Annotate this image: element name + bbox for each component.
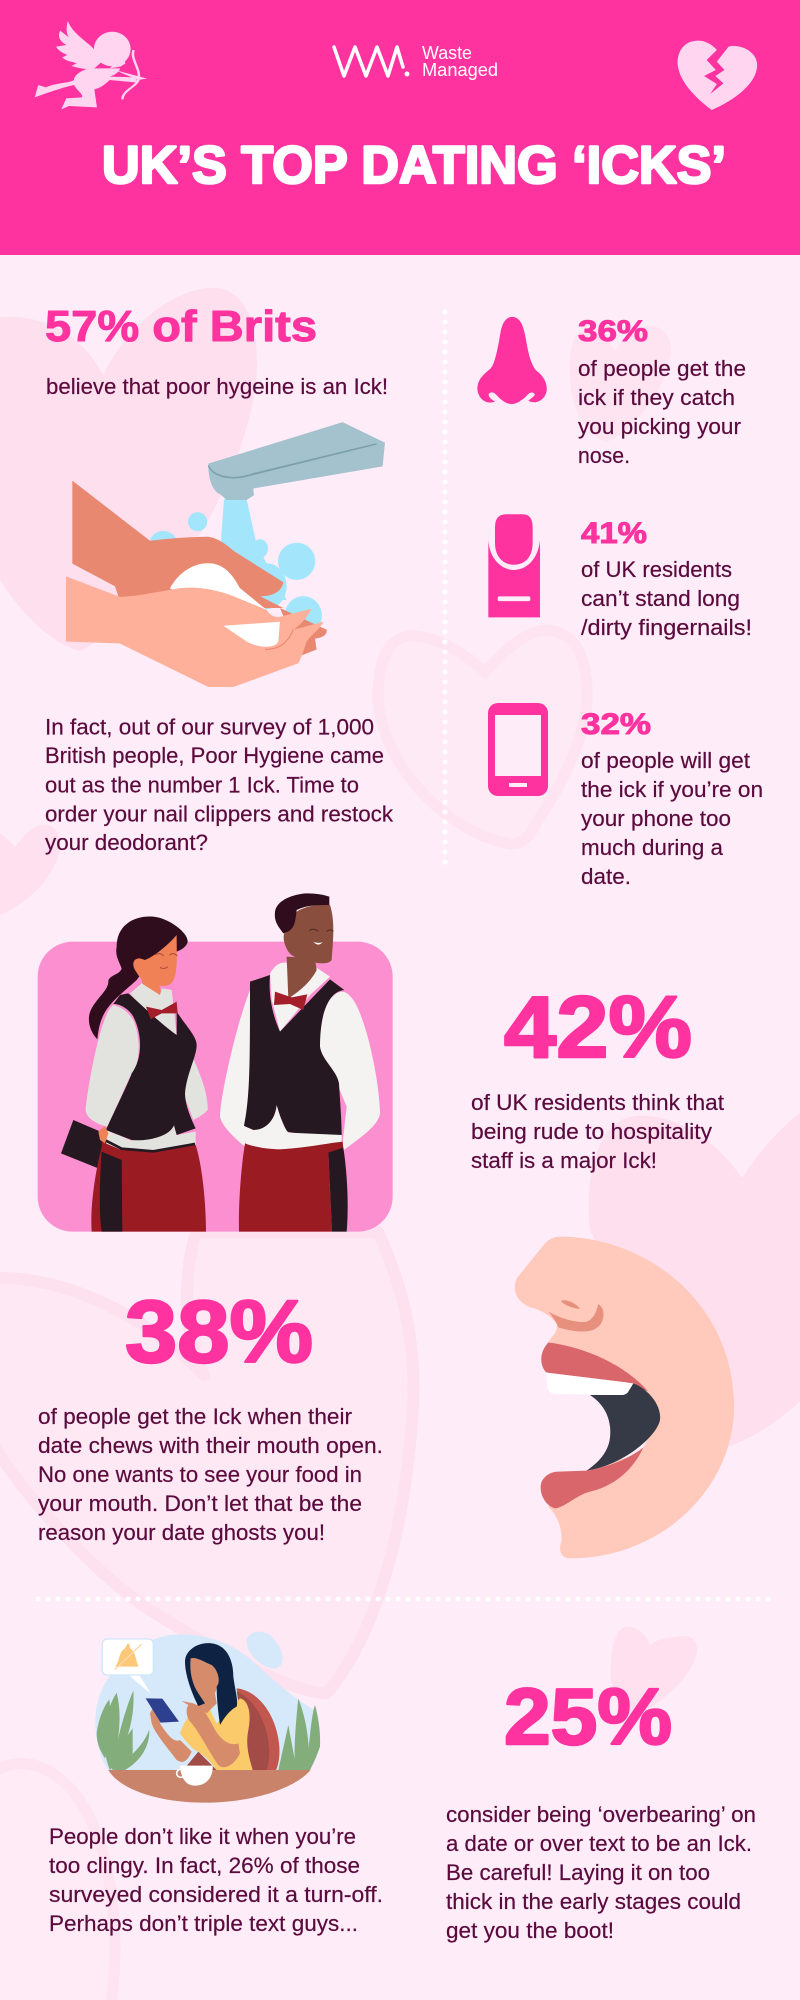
stat: 41% fingernails xyxy=(581,517,752,640)
man waiter xyxy=(220,893,380,1232)
text: poor hygeine: believe that poor hygeine is an Ick! xyxy=(46,374,388,399)
stat: 41% fingernails: 41% xyxy=(581,517,647,550)
stat: 41% fingernails: can’t stand long xyxy=(581,586,740,611)
stat: 38% chewing: date chews with their mouth open. xyxy=(38,1433,383,1458)
text: survey paragraph: In fact, out of our survey of 1,000 xyxy=(45,714,374,740)
stat: 36% nose picking xyxy=(578,315,746,468)
illustration: woman on phone xyxy=(95,1632,320,1803)
stat: 25% overbearing: consider being ‘overbearing’ on xyxy=(446,1802,756,1827)
logo: Waste Managed: Waste xyxy=(422,43,472,63)
stat: 32% phone use: 32% xyxy=(581,708,651,741)
stat: 42% rude to staff: being rude to hospitality xyxy=(471,1119,712,1144)
stat: 25% overbearing: Be careful! Laying it on too xyxy=(446,1860,710,1885)
stat: 36% nose picking: 36% xyxy=(578,315,648,348)
stat: 32% phone use: your phone too xyxy=(581,806,731,831)
text: too clingy: surveyed considered it a turn-off. xyxy=(49,1882,383,1907)
panel: waiters illustration xyxy=(38,893,393,1232)
stat heading: 57% of Brits: 57% of Brits xyxy=(45,302,317,351)
icon: fingernail xyxy=(488,514,540,617)
stat: 32% phone use xyxy=(581,708,763,889)
stat: 38% chewing: No one wants to see your food in xyxy=(38,1462,362,1487)
illustration: open mouth xyxy=(515,1237,734,1558)
illustration: hands washing under tap xyxy=(66,422,385,687)
stat: 41% fingernails: of UK residents xyxy=(581,557,732,582)
stat: 25% overbearing: thick in the early stages could xyxy=(446,1889,741,1914)
text: survey paragraph xyxy=(45,714,394,855)
stat: 42% rude to staff: staff is a major Ick! xyxy=(471,1148,657,1173)
stat: 25% overbearing: get you the boot! xyxy=(446,1918,614,1943)
text: too clingy: People don’t like it when you’re xyxy=(49,1824,356,1849)
title: UK’S TOP DATING ‘ICKS’ xyxy=(102,136,726,195)
stat: 25% overbearing: a date or over text to be an Ick. xyxy=(446,1831,752,1856)
icon: broken heart xyxy=(678,41,757,110)
text: survey paragraph: out as the number 1 Ick. Time to xyxy=(45,772,359,798)
text: survey paragraph: your deodorant? xyxy=(45,830,208,855)
stat: 32% phone use: the ick if you’re on xyxy=(581,777,763,802)
stat: 42% rude to staff xyxy=(471,979,724,1173)
stat: 38% chewing: reason your date ghosts you! xyxy=(38,1520,325,1545)
icon: phone xyxy=(488,703,548,796)
text: too clingy: Perhaps don’t triple text guys... xyxy=(49,1911,358,1936)
stat: 38% chewing: your mouth. Don’t let that be the xyxy=(38,1491,362,1516)
stat: 25% overbearing xyxy=(446,1672,756,1943)
stat: 36% nose picking: you picking your xyxy=(578,414,741,439)
header band xyxy=(0,0,800,255)
stat: 36% nose picking: nose. xyxy=(578,443,630,468)
stat: 32% phone use: date. xyxy=(581,864,631,889)
stat: 32% phone use: much during a xyxy=(581,835,724,860)
text: survey paragraph: order your nail clippers and restock xyxy=(45,802,394,826)
stat: 38% chewing xyxy=(38,1282,383,1545)
logo: Waste Managed xyxy=(334,43,498,80)
stat: 38% chewing: 38% xyxy=(125,1282,313,1381)
stat: 42% rude to staff: 42% xyxy=(504,979,692,1076)
logo: Waste Managed: Managed xyxy=(422,60,498,80)
icon: nose xyxy=(477,317,547,404)
stat: 36% nose picking: ick if they catch xyxy=(578,385,735,410)
woman waiter xyxy=(61,916,208,1232)
icon: cupid xyxy=(35,21,147,109)
stat: 36% nose picking: of people get the xyxy=(578,356,746,381)
stat: 42% rude to staff: of UK residents think that xyxy=(471,1090,724,1115)
text: too clingy xyxy=(49,1824,383,1936)
text: survey paragraph: British people, Poor Hygiene came xyxy=(45,743,384,768)
stat: 41% fingernails: /dirty fingernails! xyxy=(581,615,752,640)
text: too clingy: too clingy. In fact, 26% of those xyxy=(49,1853,360,1878)
notification bubble xyxy=(102,1639,153,1694)
stat: 25% overbearing: 25% xyxy=(504,1672,672,1761)
stat: 38% chewing: of people get the Ick when their xyxy=(38,1404,352,1429)
stat: 32% phone use: of people will get xyxy=(581,748,750,773)
